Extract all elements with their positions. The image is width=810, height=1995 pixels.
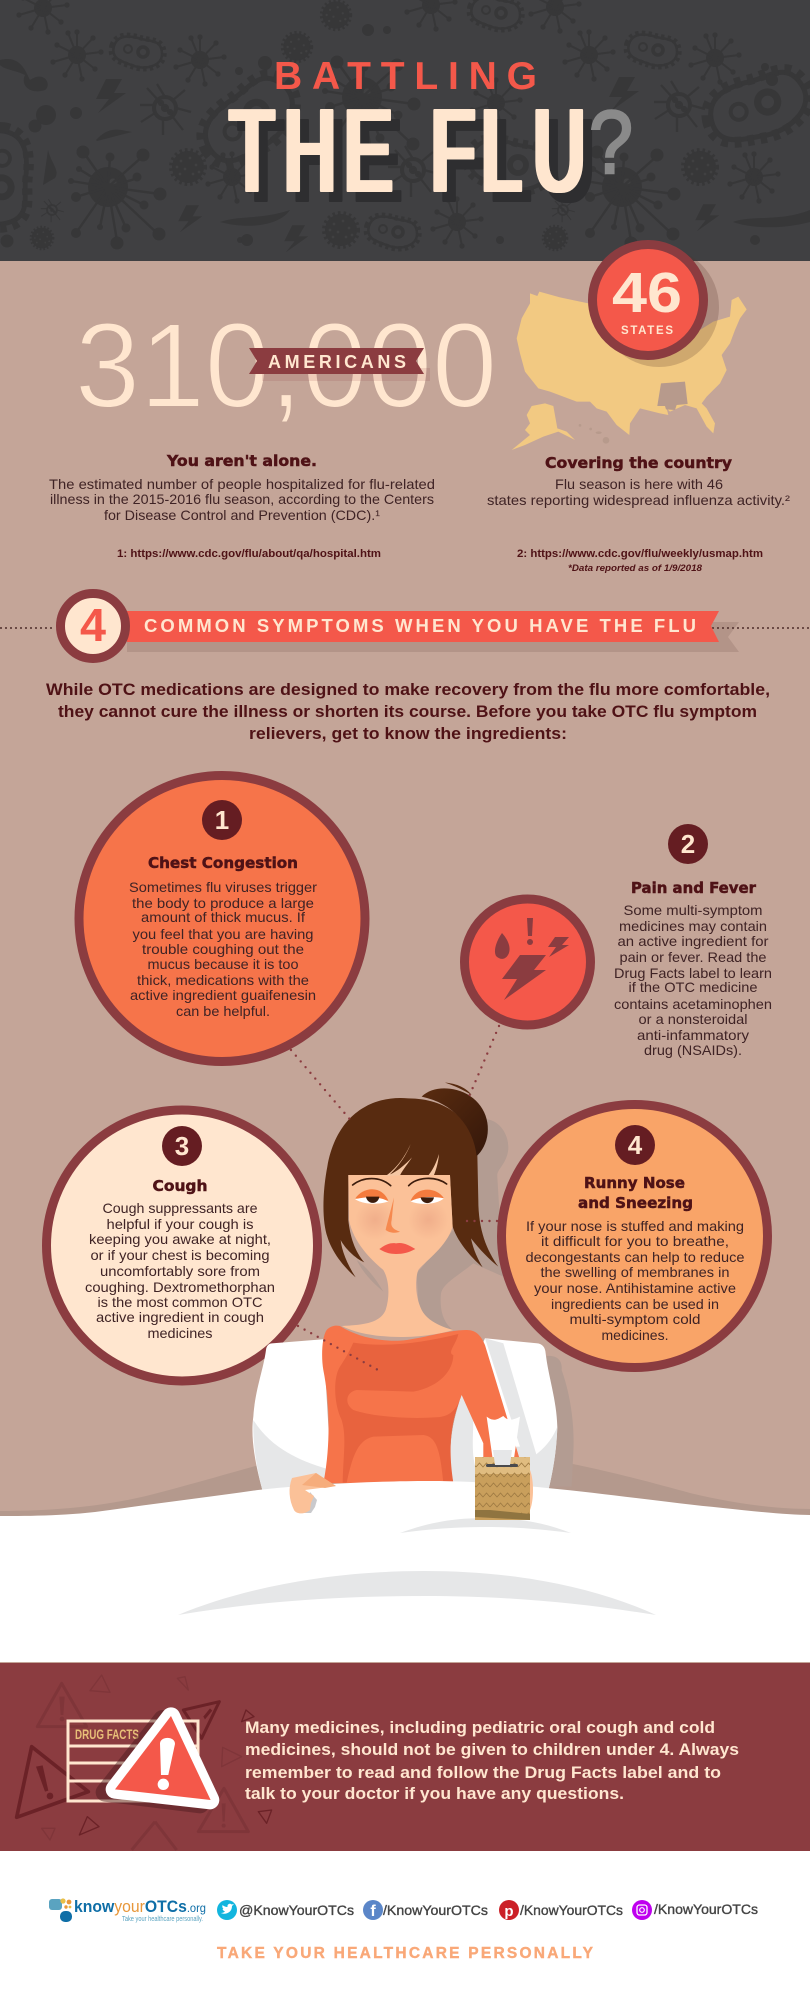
icon: small bolt (548, 937, 569, 957)
number badge 1: 1 (215, 805, 229, 835)
cheek blush (355, 1200, 448, 1240)
warning text: remember to read and follow the Drug Facts label and to (245, 1764, 721, 1782)
body text: you feel that you are having (132, 927, 314, 942)
warning text (245, 1719, 739, 1803)
body text: if the OTC medicine (628, 980, 758, 995)
text block: Covering the country (487, 454, 791, 574)
text block: You aren't alone: for Disease Control and Prevention (CDC).¹ (104, 508, 380, 523)
body text: keeping you awake at night, (89, 1232, 271, 1247)
section banner: 4 common symptoms: COMMON SYMPTOMS WHEN YOU HAVE THE FLU (144, 615, 696, 636)
drug facts label (68, 1721, 198, 1801)
body text: helpful if your cough is (106, 1217, 254, 1232)
badge: 46 states: STATES (621, 325, 673, 337)
panel: symptom 1 chest congestion (79, 776, 365, 1062)
warning text: talk to your doctor if you have any questions. (245, 1785, 624, 1803)
body text: decongestants can help to reduce (526, 1250, 744, 1265)
body text: Drug Facts label to learn (614, 966, 772, 981)
number badge 3 (162, 1126, 202, 1166)
body text: mucus because it is too (148, 957, 298, 972)
social: pinterest: p (504, 1903, 514, 1920)
text block: Covering the country: Covering the country (545, 454, 732, 472)
heading: and Sneezing (578, 1194, 693, 1212)
Alaska (512, 403, 575, 450)
body text: anti-infammatory (637, 1028, 749, 1043)
badge: 46 states: 46 (612, 261, 682, 325)
panel: symptom 3 cough (46, 1110, 318, 1381)
body text: can be helpful. (176, 1004, 270, 1019)
warning text: Many medicines, including pediatric oral cough and cold (245, 1719, 715, 1737)
body text: If your nose is stuffed and making (526, 1219, 744, 1234)
body text: medicines may contain (619, 919, 767, 934)
eyes (355, 1197, 444, 1204)
icon: big bolt (502, 955, 546, 1000)
body text: active ingredient guaifenesin (130, 988, 316, 1003)
pillow right (451, 1338, 557, 1491)
neck and face (342, 1175, 453, 1337)
body text: Cough suppressants are (102, 1201, 258, 1216)
text block: You aren't alone: You aren't alone. (166, 452, 317, 470)
body text: uncomfortably sore from (100, 1264, 260, 1279)
mouth (379, 1243, 415, 1254)
body text: or if your chest is becoming (90, 1248, 270, 1263)
social: twitter (217, 1900, 354, 1920)
title: BATTLING: BATTLING (274, 55, 537, 98)
social: instagram (632, 1900, 758, 1920)
body text: coughing. Dextromethorphan (85, 1280, 275, 1295)
social: facebook: /KnowYourOTCs (383, 1903, 488, 1918)
text block: Covering the country: states reporting widespread influenza activity.² (487, 493, 791, 508)
footer logo: knowyourOTCs.org: Take your healthcare personally. (122, 1916, 203, 1923)
tissue box (475, 1450, 533, 1520)
heading: Chest Congestion (148, 854, 298, 872)
intro paragraph: they cannot cure the illness or shorten its course. Before you take OTC flu symptom (58, 702, 757, 721)
sweater (322, 1326, 520, 1483)
heading: Runny Nose (584, 1174, 685, 1192)
bed blanket (0, 1481, 810, 1663)
body text: drug (NSAIDs). (644, 1043, 742, 1058)
big number 310,000: 310,000 (75, 297, 497, 433)
intro paragraph (46, 680, 770, 743)
dotted connector lines (291, 1026, 499, 1370)
header band with virus pattern (0, 0, 810, 261)
hill shadow behind bed (0, 1459, 810, 1530)
text block: Covering the country: *Data reported as of 1/9/2018 (568, 563, 703, 574)
tagline: TAKE YOUR HEALTHCARE PERSONALLY (217, 1945, 594, 1962)
pillow left (252, 1339, 332, 1493)
body text: Sometimes flu viruses trigger (129, 880, 318, 895)
body text: trouble coughing out the (142, 942, 304, 957)
warning panel (0, 1662, 810, 1851)
social: facebook: f (370, 1903, 376, 1920)
number badge 2 (668, 824, 708, 864)
body text: the swelling of membranes in (540, 1265, 730, 1280)
footer logo: knowyourOTCs.org: knowyourOTCs.org (74, 1897, 206, 1916)
map of the United States (512, 292, 747, 450)
text block: You aren't alone: The estimated number of people hospitalized for flu-related (49, 477, 435, 492)
illustration: sick woman in bed (252, 1083, 557, 1493)
nose (386, 1197, 400, 1233)
body text: pain or fever. Read the (620, 950, 766, 965)
blanket fold large (178, 1571, 656, 1615)
heading (578, 1174, 693, 1212)
body text: is the most common OTC (98, 1295, 263, 1310)
icon circle: pain and fever (464, 899, 590, 1025)
title: THE FLU: THE FLU (230, 87, 585, 216)
body text: thick, medications with the (137, 973, 309, 988)
footer white area (0, 1851, 810, 1995)
body text: the body to produce a large (132, 896, 314, 911)
number badge 2: 2 (681, 829, 695, 859)
social: pinterest (499, 1900, 623, 1920)
social: twitter: @KnowYourOTCs (239, 1903, 354, 1918)
number badge 1 (202, 800, 242, 840)
section banner: 4 common symptoms: 4 (80, 599, 106, 651)
body text (129, 880, 318, 1019)
text block: Covering the country: 2: https://www.cdc.gov/flu/weekly/usmap.htm (517, 548, 763, 560)
body text: medicines. (602, 1328, 668, 1343)
eyebrows (353, 1178, 447, 1186)
tissue (487, 1416, 520, 1463)
drug facts label: DRUG FACTS (75, 1726, 139, 1742)
body text: Some multi-symptom (624, 903, 762, 918)
blanket fold small (400, 1518, 571, 1533)
text block: You aren't alone (49, 452, 435, 560)
intro paragraph: relievers, get to know the ingredients: (249, 724, 567, 743)
title: question mark: ? (589, 92, 633, 192)
intro paragraph: While OTC medications are designed to make recovery from the flu more comfortable, (46, 680, 770, 699)
body text: amount of thick mucus. If (141, 910, 305, 925)
body text (614, 903, 772, 1058)
ribbon: AMERICANS (249, 348, 430, 381)
continental states (517, 292, 747, 435)
icon: exclamation (527, 918, 533, 945)
social: pinterest: /KnowYourOTCs (520, 1903, 623, 1918)
body text (526, 1219, 744, 1343)
text block: You aren't alone: illness in the 2015-2016 flu season, according to the Centers (50, 492, 434, 507)
body text: active ingredient in cough (96, 1310, 264, 1325)
number badge 4: 4 (628, 1130, 643, 1160)
social: instagram: /KnowYourOTCs (654, 1902, 758, 1917)
warning text: medicines, should not be given to children under 4. Always (245, 1741, 739, 1759)
panel: symptom 2 pain and fever (614, 824, 772, 1058)
body text: multi-symptom cold (570, 1312, 700, 1327)
Alabama-like unaffected states (657, 382, 688, 410)
badge: 46 states (592, 244, 719, 367)
ribbon: AMERICANS: AMERICANS (268, 352, 406, 372)
heading: Pain and Fever (631, 879, 756, 897)
warning triangle icon (105, 1716, 211, 1804)
section banner: 4 common symptoms (60, 594, 739, 658)
Hawaii (579, 424, 609, 444)
background warning triangles (17, 1675, 272, 1850)
body text: contains acetaminophen (614, 997, 772, 1012)
sweater shading (335, 1334, 462, 1483)
eye shadow (355, 1189, 444, 1201)
body text: an active ingredient for (618, 934, 769, 949)
body text: it difficult for you to breathe, (541, 1234, 729, 1249)
heading: Cough (152, 1177, 208, 1195)
body text: ingredients can be used in (551, 1297, 719, 1312)
panel: symptom 4 runny nose and sneezing (502, 1104, 768, 1368)
footer logo: knowyourOTCs.org (49, 1897, 206, 1923)
body text: medicines (148, 1326, 213, 1341)
hand on blanket (290, 1473, 336, 1513)
fringe slits (386, 1144, 439, 1176)
text block: You aren't alone: 1: https://www.cdc.gov/flu/about/qa/hospital.htm (117, 548, 381, 560)
logo icon (49, 1898, 72, 1922)
woman's cast shadow (357, 1119, 574, 1487)
text block: Covering the country: Flu season is here with 46 (555, 477, 723, 492)
body text: or a nonsteroidal (638, 1012, 748, 1027)
number badge 4 (615, 1125, 655, 1165)
hair back (323, 1098, 498, 1277)
hair bun (422, 1083, 488, 1156)
social: facebook (363, 1900, 488, 1920)
body text: your nose. Antihistamine active (534, 1281, 736, 1296)
body text (85, 1201, 275, 1341)
number badge 3: 3 (175, 1131, 189, 1161)
icon: flame (495, 933, 510, 959)
